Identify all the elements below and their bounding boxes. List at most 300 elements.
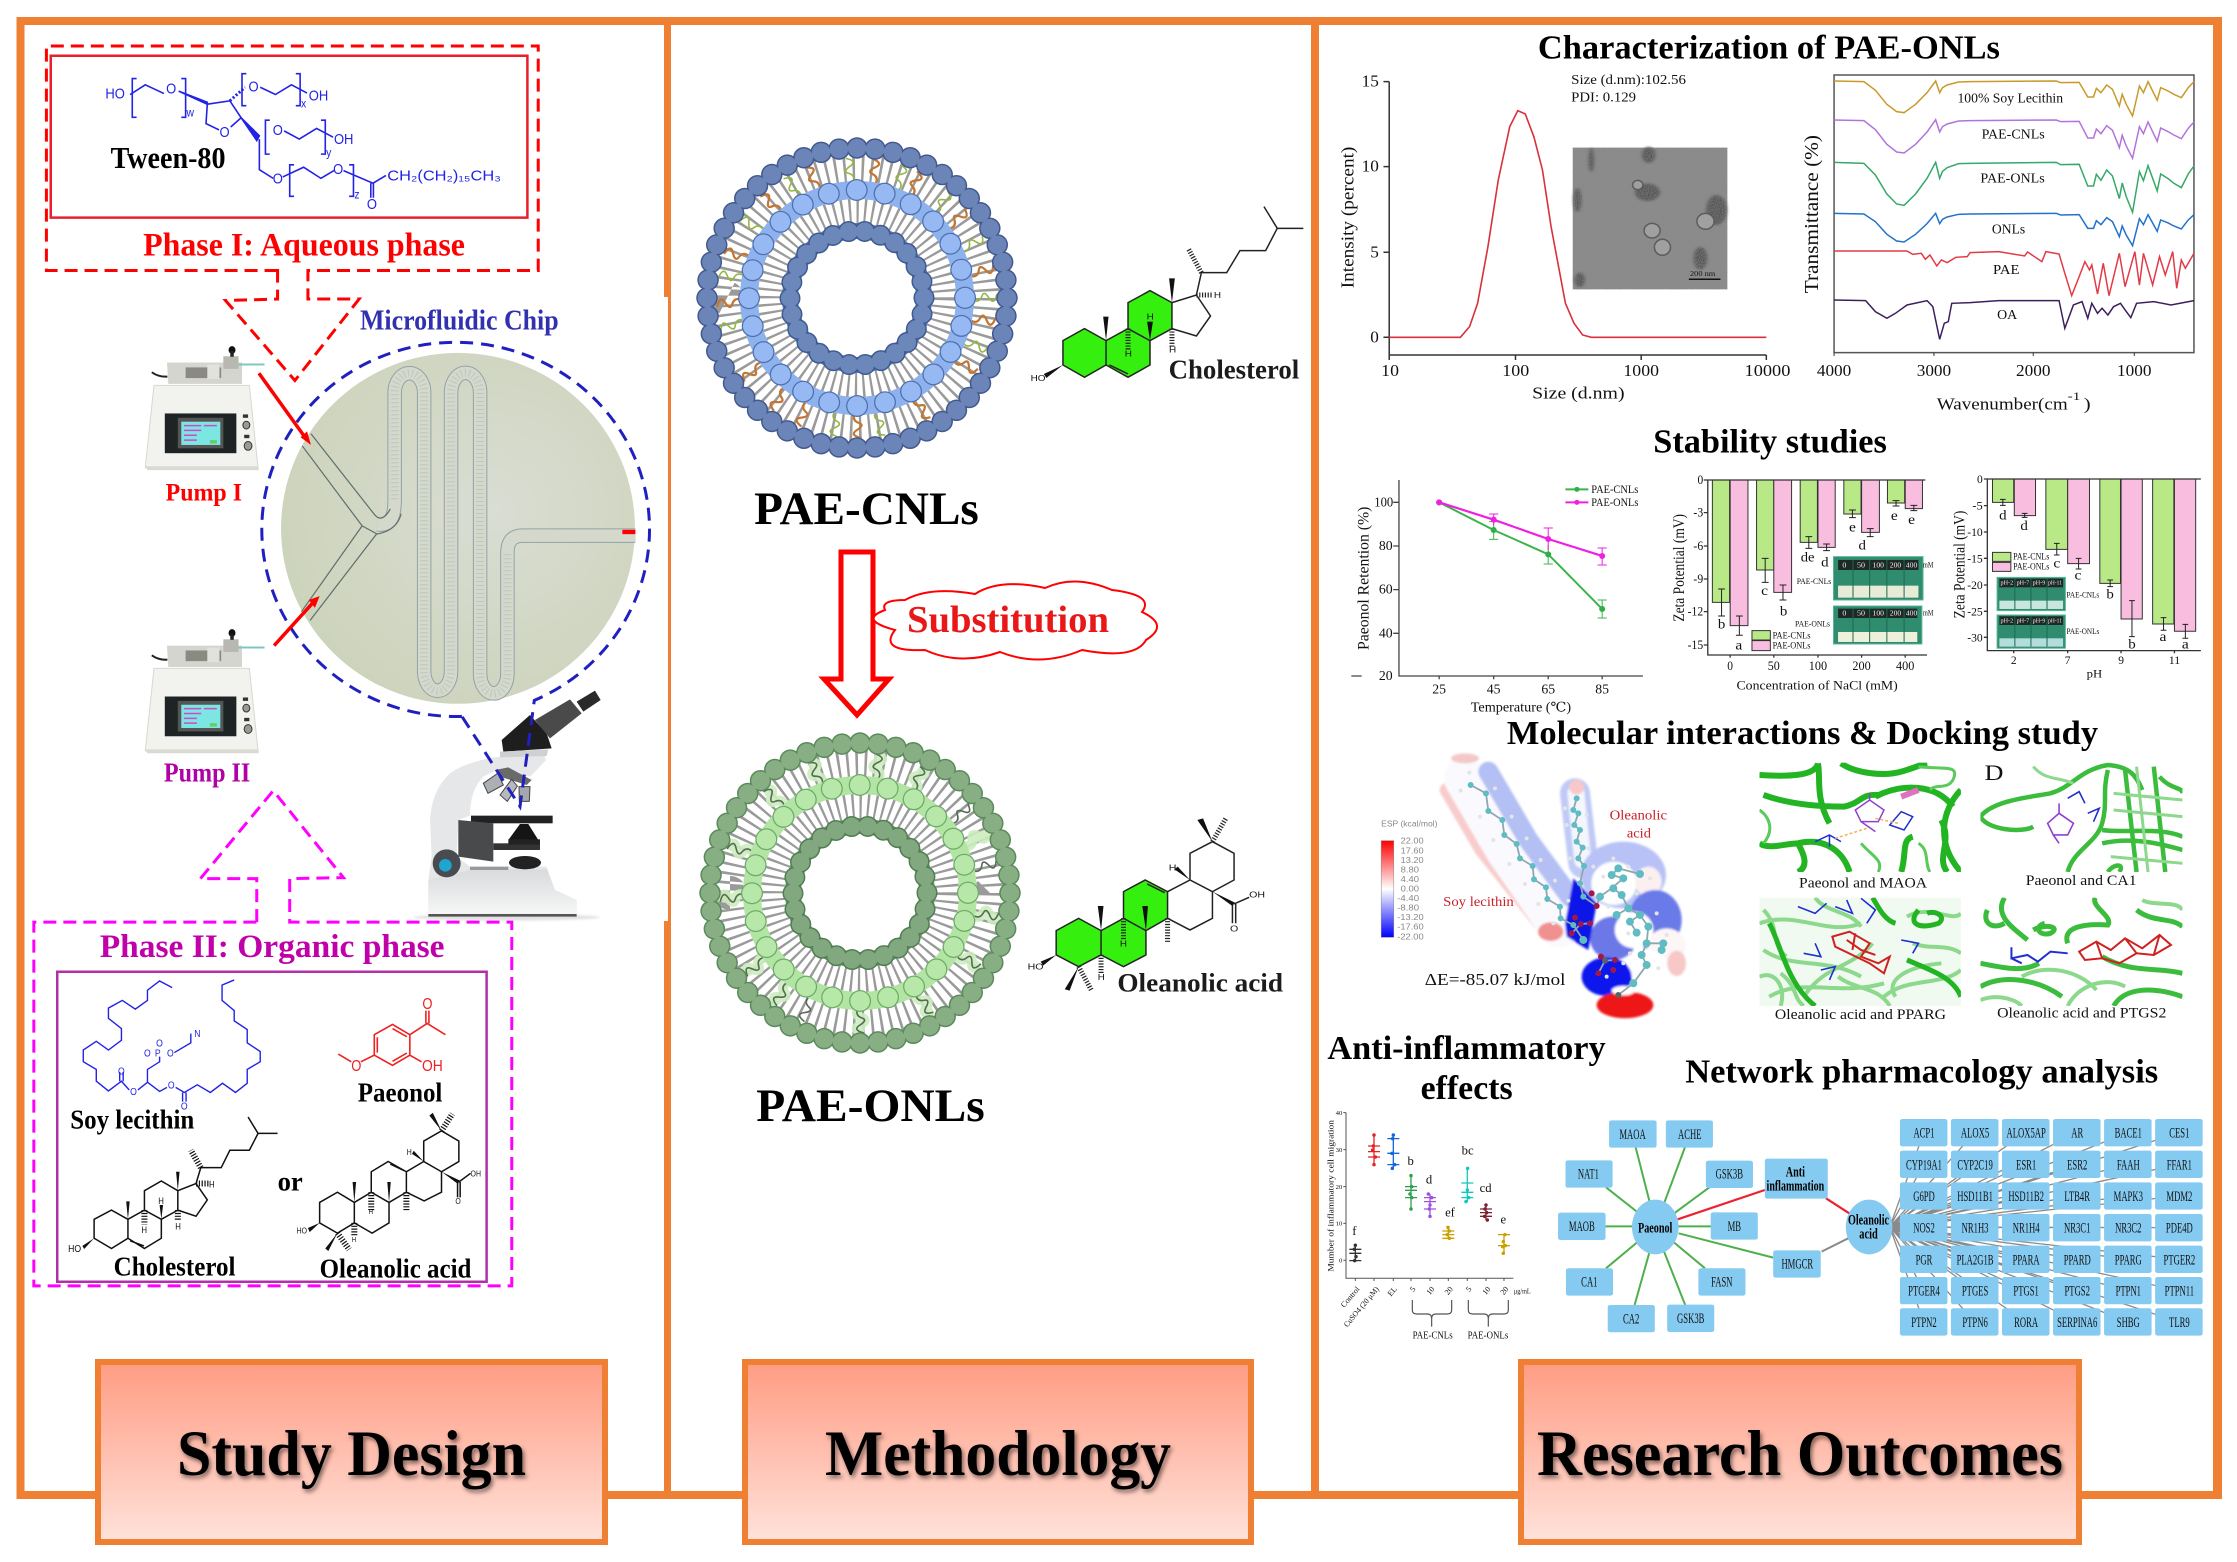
soy lecithin structure: O	[167, 1048, 174, 1060]
label box: study design: Study Design	[177, 1418, 526, 1490]
pH bar chart: -5	[1972, 499, 1983, 512]
phase I aqueous box: O	[249, 79, 259, 95]
paeonol structure: O	[351, 1058, 361, 1075]
cholesterol green structure: H	[1169, 346, 1176, 354]
network node labels: PDE4D	[2166, 1219, 2193, 1236]
dot plot: 30	[1336, 1147, 1343, 1154]
network node labels: RORA	[2014, 1313, 2038, 1331]
TEM image	[1573, 147, 1727, 289]
TEM image: 200 nm	[1690, 270, 1715, 278]
size distribution chart and characterization: Intensity (percent)	[1339, 147, 1359, 288]
dot plot: f	[1352, 1224, 1357, 1238]
NaCl bar chart: d	[1858, 537, 1866, 553]
pump I label: Pump I	[166, 479, 242, 507]
phase I aqueous box: O	[333, 161, 343, 177]
FTIR spectra: PAE	[1993, 262, 2019, 278]
phase I aqueous box: OH	[309, 88, 328, 103]
network node labels: HSD11B1	[1957, 1188, 1993, 1205]
cholesterol green structure: H	[1125, 350, 1132, 358]
cholesterol label green: Cholesterol	[1169, 353, 1299, 385]
oleanolic acid green structure: HO	[1028, 962, 1044, 972]
network node labels: TLR9	[2169, 1313, 2190, 1331]
oleanolic acid structure: H	[407, 1147, 412, 1157]
pH bar chart: b	[2106, 586, 2114, 602]
network node labels: ALOX5AP	[2006, 1124, 2046, 1141]
vial photos pH: pH-11	[2048, 617, 2062, 624]
NaCl bar chart	[1670, 473, 1933, 693]
pH bar chart: -25	[1967, 605, 1983, 618]
size distribution chart and characterization: 10	[1381, 362, 1399, 380]
soy lecithin structure: N	[194, 1029, 201, 1040]
phase II title: Phase II: Organic phase	[100, 928, 445, 964]
FTIR spectra: 3000	[1917, 362, 1951, 380]
network node labels: ALOX5	[1961, 1124, 1989, 1141]
soy lecithin structure: O	[130, 1086, 137, 1098]
oleanolic acid green structure: H	[1098, 973, 1105, 982]
size distribution chart and characterization: 5	[1370, 243, 1379, 262]
network edges	[1605, 1133, 2179, 1322]
soy lecithin structure: O	[181, 1101, 188, 1113]
network node labels: PPARD	[2064, 1251, 2091, 1268]
retention line chart: Paeonol Retention (%)	[1354, 507, 1372, 650]
ESP surface model	[1447, 753, 1686, 1018]
soy lecithin structure: P	[155, 1048, 161, 1060]
docking section: Paeonol and CA1	[2026, 873, 2137, 889]
pH bar chart: pH	[2087, 667, 2102, 680]
oleanolic acid green structure: H	[1169, 863, 1176, 873]
network node labels: CES1	[2169, 1124, 2189, 1141]
liposome: PAE-CNLs	[707, 148, 1007, 448]
NaCl bar chart: PAE-ONLs	[1773, 640, 1811, 650]
panel: methodology	[707, 148, 1303, 1132]
oleanolic acid green structure: H	[1120, 939, 1127, 948]
pH bar chart: 9	[2118, 653, 2124, 667]
oleanolic acid green structure: O	[1230, 924, 1239, 934]
network node labels: SHBG	[2117, 1313, 2140, 1331]
docking section: D	[1984, 760, 2003, 785]
phase I title: Phase I: Aqueous phase	[143, 226, 465, 263]
network node labels: BACE1	[2115, 1124, 2142, 1141]
network node labels: inflammation	[1767, 1177, 1824, 1194]
retention line chart: 45	[1487, 682, 1501, 697]
NaCl bar chart: c	[1761, 583, 1768, 599]
dot plot: 10	[1424, 1285, 1437, 1297]
FTIR spectra: 2000	[2016, 362, 2050, 380]
network node labels: MB	[1728, 1218, 1741, 1235]
ESP legend	[1381, 820, 1438, 941]
soy lecithin structure: O	[118, 1066, 125, 1078]
vial photos NaCl: 100	[1873, 562, 1884, 569]
pH bar chart: -20	[1967, 578, 1983, 592]
FTIR spectra: 1000	[2117, 362, 2151, 380]
retention line chart: 25	[1432, 682, 1446, 697]
docking section: acid	[1627, 825, 1651, 841]
network node labels: G6PD	[1913, 1188, 1935, 1205]
network node labels: AR	[2071, 1124, 2084, 1141]
ESP legend: -8.80	[1397, 904, 1419, 913]
network node labels: NR3C1	[2064, 1219, 2090, 1236]
vial photos NaCl: 0	[1842, 610, 1846, 617]
oleanolic acid structure: H	[369, 1209, 373, 1216]
paeonol structure	[338, 996, 445, 1075]
ESP legend: -13.20	[1397, 914, 1424, 922]
tween label: Tween-80	[111, 142, 226, 176]
dot plot: 20	[1443, 1285, 1455, 1297]
pH bar chart: a	[2160, 629, 2167, 645]
network node labels: NR1H3	[1962, 1219, 1988, 1236]
network node labels: MAPK3	[2114, 1188, 2143, 1205]
NaCl bar chart: e	[1891, 508, 1898, 524]
oleanolic acid structure	[297, 1113, 481, 1251]
network node labels: HMGCR	[1781, 1255, 1814, 1272]
label box: research outcomes: Research Outcomes	[1537, 1418, 2063, 1490]
phase I aqueous box: CH₂(CH₂)₁₅CH₃	[387, 168, 501, 183]
heading: anti-inflammatory: Anti-inflammatory	[1327, 1030, 1606, 1067]
cholesterol green structure	[754, 207, 1303, 535]
vial photos NaCl: 200	[1890, 562, 1901, 569]
pH bar chart: 2	[2011, 653, 2017, 667]
retention line chart: PAE-ONLs	[1591, 495, 1638, 509]
pH bar chart: -15	[1967, 552, 1983, 565]
size distribution chart and characterization: Size (d.nm):102.56	[1571, 72, 1686, 88]
phase I aqueous box: w	[186, 107, 194, 119]
network node labels: FAAH	[2117, 1156, 2140, 1173]
vial photos NaCl: PAE-ONLs	[1795, 619, 1830, 628]
dashed magnifier outline	[262, 342, 650, 807]
docking: MAOA	[1759, 763, 1961, 872]
network node labels: PTGS1	[2013, 1282, 2039, 1299]
network node labels: ACHE	[1678, 1126, 1702, 1143]
pump I	[145, 346, 265, 470]
retention line chart: 40	[1379, 626, 1393, 641]
phase II organic box	[34, 759, 512, 1286]
ESP legend: ESP (kcal/mol)	[1381, 820, 1438, 829]
oleanolic acid structure: OH	[471, 1169, 481, 1179]
substitution cloud: Substitution	[907, 599, 1109, 641]
oleanolic acid structure: H	[352, 1236, 356, 1244]
NaCl bar chart: -15	[1688, 638, 1703, 652]
phase I aqueous box: x	[301, 98, 307, 111]
pH bar chart: -10	[1967, 525, 1983, 539]
retention line chart	[1351, 480, 1643, 715]
heading: anti-inflammatory: effects	[1421, 1070, 1513, 1107]
pH bar chart: c	[2053, 555, 2060, 571]
network node labels: ESR1	[2016, 1156, 2036, 1173]
network node labels: CA1	[1581, 1273, 1597, 1290]
network node labels: FASN	[1711, 1273, 1733, 1290]
dot plot: μg/mL	[1514, 1286, 1531, 1295]
oleanolic acid label: Oleanolic acid	[320, 1255, 471, 1284]
NaCl bar chart: PAE-CNLs	[1773, 630, 1811, 640]
NaCl bar chart: 100	[1809, 659, 1827, 673]
NaCl bar chart: 200	[1852, 659, 1871, 673]
panel: research outcomes	[1327, 29, 2203, 1341]
paeonol label: Paeonol	[358, 1079, 442, 1108]
network node labels: PTPN1	[2116, 1282, 2141, 1299]
cholesterol label: Cholesterol	[114, 1253, 236, 1282]
retention line chart: 80	[1379, 539, 1393, 554]
oleanolic acid green structure: OH	[1249, 890, 1265, 900]
network node labels: acid	[1859, 1225, 1878, 1242]
network node labels: FFAR1	[2167, 1156, 2192, 1173]
FTIR spectra: -1	[2068, 389, 2080, 403]
FTIR spectra: 100% Soy Lecithin	[1957, 90, 2063, 106]
ESP legend: -17.60	[1397, 923, 1424, 932]
docking section: Paeonol and MAOA	[1799, 876, 1927, 891]
docking section: Oleanolic	[1610, 807, 1667, 823]
ESP legend: 4.40	[1401, 876, 1419, 884]
docking section	[1381, 715, 2182, 1023]
FTIR spectra: )	[2084, 395, 2091, 414]
size distribution chart and characterization: 1000	[1623, 362, 1659, 380]
dot plot: CuSO4 (20 μM)	[1342, 1285, 1381, 1329]
oleanolic acid structure: O	[455, 1196, 461, 1206]
phase I aqueous box	[46, 46, 538, 380]
size distribution chart and characterization: Size (d.nm)	[1532, 384, 1625, 403]
pH bar chart: c	[2075, 567, 2082, 583]
paeonol structure: O	[422, 996, 433, 1013]
label box: methodology	[745, 1362, 1251, 1542]
network node labels: MAOA	[1619, 1126, 1646, 1143]
NaCl bar chart: e	[1908, 512, 1915, 528]
vial photos NaCl: PAE-CNLs	[1797, 576, 1831, 586]
panel: study design	[34, 46, 650, 1286]
vial photos pH: pH-7	[2017, 617, 2029, 624]
network node labels: PTGER4	[1908, 1282, 1940, 1299]
vial photos NaCl: 400	[1906, 610, 1917, 617]
dot plot: bc	[1462, 1143, 1474, 1157]
oleanolic label green: Oleanolic acid	[1117, 968, 1283, 998]
NaCl bar chart: -6	[1693, 539, 1703, 553]
phase I aqueous box: OH	[334, 131, 353, 147]
cholesterol structure: H	[209, 1179, 215, 1190]
soy lecithin structure: O	[156, 1038, 163, 1050]
or label: or	[278, 1168, 303, 1197]
network node labels: GSK3B	[1716, 1165, 1743, 1182]
vial photos NaCl: 400	[1906, 562, 1917, 569]
retention line chart: Temperature (℃)	[1471, 700, 1571, 715]
NaCl bar chart: Concentration of NaCl (mM)	[1736, 678, 1898, 693]
docking: PPARG	[1759, 898, 1961, 1006]
cholesterol green structure: H	[1147, 312, 1154, 321]
liposome: PAE-ONLs	[710, 743, 1010, 1043]
soy lecithin structure: O	[168, 1080, 175, 1092]
ESP legend: 17.60	[1401, 847, 1424, 855]
microscope	[413, 691, 601, 921]
phase I aqueous box: O	[166, 81, 176, 97]
pH bar chart: b	[2128, 636, 2136, 652]
vial photos pH: pH-11	[2048, 580, 2062, 587]
network node labels: PTPN6	[1962, 1313, 1988, 1331]
dot plot: 5	[1464, 1285, 1474, 1294]
network node labels: MDM2	[2166, 1188, 2192, 1205]
vial photos NaCl: 50	[1857, 610, 1865, 617]
substitution cloud	[874, 581, 1157, 660]
cholesterol green structure: H	[1214, 291, 1221, 300]
NaCl bar chart: e	[1849, 520, 1856, 535]
retention line chart: 100	[1374, 495, 1393, 510]
cholesterol structure: HO	[68, 1243, 81, 1255]
retention line chart: PAE-CNLs	[1591, 482, 1638, 496]
size distribution chart and characterization: 15	[1362, 72, 1379, 91]
pH bar chart: d	[1999, 507, 2007, 523]
arrows into chip	[259, 373, 320, 646]
vial photos NaCl: 0	[1842, 562, 1846, 569]
NaCl bar chart: de	[1801, 550, 1815, 565]
FTIR spectra: PAE-ONLs	[1980, 170, 2045, 186]
dot plot: b	[1407, 1154, 1414, 1168]
cholesterol structure: H	[141, 1225, 147, 1235]
oleanolic acid green structure	[756, 818, 1283, 1132]
pH bar chart	[1950, 472, 2201, 680]
network pharmacology	[1558, 1053, 2203, 1336]
pH bar chart: -30	[1967, 631, 1983, 644]
size distribution chart and characterization: 10000	[1745, 362, 1790, 380]
tween-80 structure	[130, 74, 386, 198]
network node labels: CA2	[1623, 1310, 1639, 1327]
NaCl bar chart: a	[1735, 637, 1742, 653]
vial photos pH: pH-9	[2033, 580, 2045, 587]
dot plot: PAE-ONLs	[1468, 1330, 1508, 1341]
FTIR spectra: ONLs	[1992, 221, 2025, 237]
docking section: ΔE=-85.07 kJ/mol	[1425, 970, 1566, 989]
FTIR spectra: Wavenumber(cm	[1937, 395, 2068, 414]
pH bar chart: PAE-CNLs	[2013, 551, 2049, 561]
vial photos NaCl: 50	[1857, 562, 1865, 569]
chip label: Microfluidic Chip	[360, 304, 559, 336]
phase I aqueous box: HO	[105, 86, 125, 102]
pH bar chart: 11	[2169, 653, 2180, 667]
NaCl bar chart: Zeta Potential (mV)	[1670, 514, 1688, 622]
stability charts: mM	[1923, 560, 1933, 570]
pH bar chart: a	[2182, 636, 2189, 652]
phase I aqueous box: O	[219, 125, 230, 140]
label box: research outcomes	[1521, 1362, 2079, 1542]
cholesterol structure	[68, 1117, 278, 1255]
network node labels: PTGS2	[2065, 1282, 2090, 1299]
network node labels: NAT1	[1578, 1165, 1599, 1182]
pH bar chart: 0	[1977, 472, 1983, 486]
pH bar chart: PAE-ONLs	[2013, 561, 2049, 571]
ESP legend: 13.20	[1401, 857, 1424, 865]
network node labels: ESR2	[2067, 1156, 2087, 1173]
network node labels: PGR	[1916, 1251, 1933, 1268]
NaCl bar chart: b	[1718, 616, 1725, 632]
cholesterol structure: H	[175, 1221, 181, 1232]
ESP legend: -22.00	[1397, 933, 1424, 941]
dot plot: 10	[1480, 1285, 1493, 1297]
NaCl bar chart: 400	[1896, 659, 1914, 673]
network node labels: HSD11B2	[2008, 1188, 2044, 1205]
network node labels: PLA2G1B	[1957, 1251, 1994, 1268]
network node labels: CYP2C19	[1957, 1156, 1993, 1173]
dot plot: 5	[1408, 1285, 1418, 1294]
FTIR spectra: PAE-CNLs	[1982, 126, 2045, 142]
label box: methodology: Methodology	[825, 1418, 1171, 1490]
dot plot: 10	[1336, 1221, 1343, 1228]
phase I aqueous box: O	[367, 196, 377, 212]
network node labels: PPARA	[2013, 1251, 2040, 1268]
vial photos pH: pH-2	[2001, 617, 2013, 624]
NaCl bar chart: d	[1821, 555, 1829, 570]
pH bar chart: d	[2020, 518, 2028, 534]
oleanolic acid structure: HO	[297, 1226, 307, 1236]
NaCl bar chart: -12	[1688, 604, 1703, 618]
NaCl bar chart: b	[1780, 604, 1787, 619]
phase I aqueous box: O	[273, 171, 283, 187]
network node labels: NOS2	[1913, 1219, 1935, 1236]
vial photos pH: pH-7	[2017, 580, 2029, 587]
FTIR spectra	[1802, 75, 2194, 414]
soy lecithin label: Soy lecithin	[70, 1106, 194, 1135]
docking: CA1	[1980, 765, 2182, 872]
stability charts: mM	[1923, 608, 1933, 618]
network node labels: Paeonol	[1638, 1219, 1673, 1236]
retention line chart: 20	[1379, 669, 1393, 684]
pump II	[145, 629, 265, 753]
phase I aqueous box: z	[354, 189, 360, 202]
vial photos pH: pH-2	[2001, 580, 2013, 587]
PAE-ONLs label: PAE-ONLs	[756, 1081, 985, 1132]
dot plot	[1327, 1110, 1531, 1341]
paeonol structure: OH	[422, 1058, 443, 1075]
dot plot: Control	[1339, 1284, 1362, 1309]
network nodes	[1558, 1119, 2203, 1336]
pH bar chart: 7	[2065, 653, 2071, 667]
network node labels: ACP1	[1913, 1124, 1935, 1141]
ESP legend: 8.80	[1401, 866, 1419, 875]
heading: stability: Stability studies	[1653, 423, 1887, 460]
pump II label: Pump II	[164, 759, 250, 788]
pH bar chart: PAE-CNLs	[2067, 590, 2099, 599]
NaCl bar chart: 50	[1768, 659, 1780, 673]
soy lecithin structure: O	[144, 1048, 151, 1060]
dot plot: e	[1501, 1212, 1507, 1226]
network node labels: MAOB	[1569, 1218, 1595, 1235]
FTIR spectra: OA	[1997, 307, 2018, 323]
network node labels: PTGER2	[2164, 1251, 2195, 1268]
soy lecithin structure	[83, 980, 260, 1113]
network node labels: LTB4R	[2064, 1188, 2091, 1205]
network node labels: CYP19A1	[1906, 1156, 1942, 1173]
docking section: Oleanolic acid and PPARG	[1775, 1007, 1946, 1023]
label box: study design	[98, 1362, 605, 1542]
network node labels: Anti	[1786, 1163, 1805, 1180]
pH bar chart: PAE-ONLs	[2067, 626, 2099, 636]
ESP legend: 0.00	[1401, 885, 1419, 894]
phase I aqueous box: y	[326, 147, 332, 160]
vial photos NaCl	[1795, 557, 1933, 644]
vial photos NaCl: 100	[1873, 610, 1884, 617]
dot plot: d	[1426, 1172, 1433, 1186]
dot plot: 20	[1336, 1184, 1343, 1191]
dot plot: EL	[1386, 1285, 1399, 1298]
network node labels: GSK3B	[1677, 1309, 1704, 1327]
dot plot: 40	[1336, 1110, 1343, 1117]
substitution arrow	[824, 552, 889, 715]
size distribution chart and characterization	[1339, 29, 2194, 414]
retention line chart: 60	[1379, 582, 1393, 597]
NaCl bar chart: 0	[1697, 473, 1703, 487]
network node labels: PPARG	[2115, 1251, 2142, 1268]
docking section: Soy lecithin	[1443, 894, 1514, 910]
size distribution chart and characterization: 10	[1362, 157, 1379, 176]
docking: PTGS2	[1980, 898, 2182, 1006]
FTIR spectra: 4000	[1817, 362, 1851, 380]
dot plot: ef	[1445, 1206, 1456, 1220]
vial photos pH: pH-9	[2033, 617, 2045, 624]
dot plot: 0	[1339, 1258, 1343, 1265]
